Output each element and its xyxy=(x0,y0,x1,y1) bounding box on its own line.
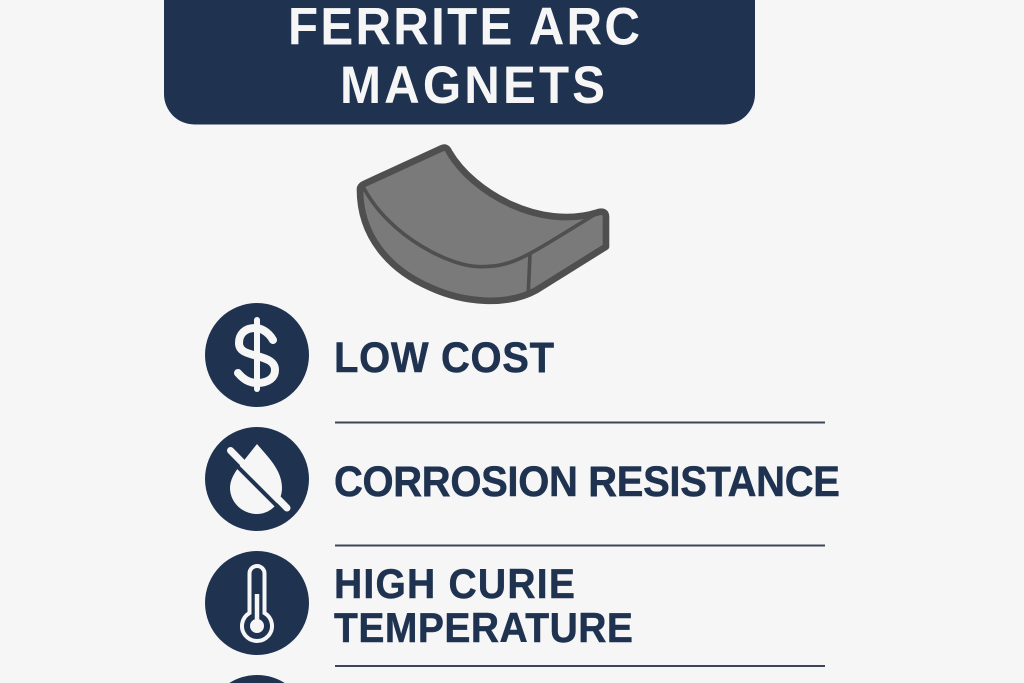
label: low cost: LOW COST xyxy=(334,333,554,381)
icon: thermometer xyxy=(205,551,309,655)
icon: ferrite arc magnet xyxy=(360,148,606,301)
row: low cost xyxy=(205,303,554,407)
label: high curie temperature: HIGH CURIE xyxy=(334,560,575,607)
title banner: MAGNETS xyxy=(340,55,605,114)
row: high curie temperature xyxy=(205,551,633,655)
icon: dollar sign xyxy=(205,303,309,407)
title banner xyxy=(164,0,755,124)
row: corrosion resistance xyxy=(205,427,840,531)
icon: fourth circle, cropped xyxy=(229,675,285,683)
label: high curie temperature xyxy=(334,560,633,651)
icon: crossed water drop xyxy=(205,427,309,531)
label: high curie temperature: TEMPERATURE xyxy=(334,604,633,651)
label: corrosion resistance: CORROSION RESISTANCE xyxy=(334,457,840,505)
